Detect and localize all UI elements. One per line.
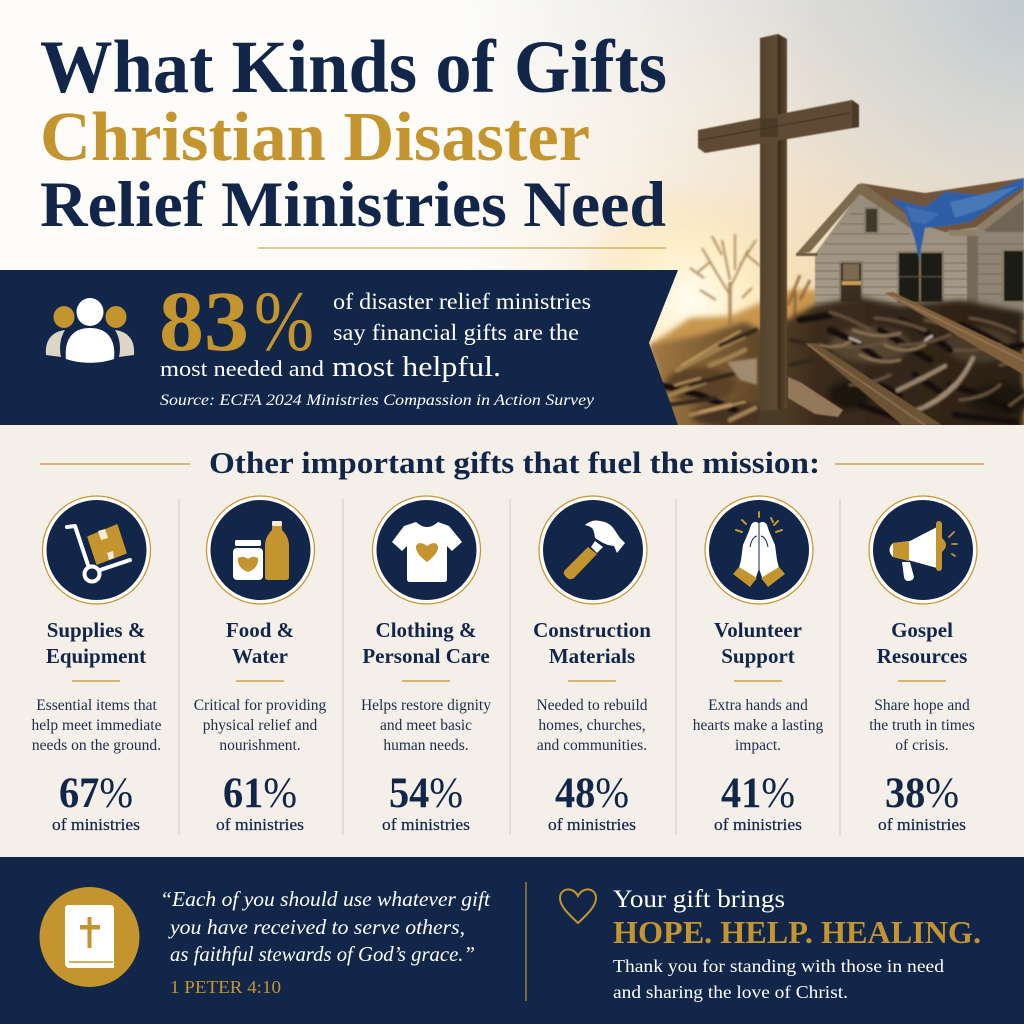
icon: heart outline — [560, 889, 596, 923]
hero photo: cross and damaged house at sunrise — [0, 0, 1024, 430]
icon: hand truck with box — [42, 496, 150, 604]
description: nourishment. — [219, 737, 301, 754]
scripture reference: 1 PETER 4:10 — [170, 977, 281, 997]
statistic: 54% — [389, 770, 463, 817]
description: Helps restore dignity — [361, 697, 491, 714]
panel: gospel resources — [869, 496, 977, 834]
statistic text: most helpful. — [332, 351, 501, 383]
description: physical relief and — [203, 717, 317, 734]
statistic: 38% — [885, 770, 959, 817]
column title: Food & — [226, 618, 294, 642]
statistic: 48% — [555, 770, 629, 817]
statistic: 67% — [59, 770, 133, 817]
statistic text — [160, 289, 591, 383]
scripture quote: you have received to serve others, — [168, 915, 465, 939]
column title: Support — [721, 644, 795, 668]
caption: of ministries — [382, 815, 470, 834]
damaged house — [796, 178, 1024, 320]
description: needs on the ground. — [32, 737, 161, 754]
description: impact. — [735, 737, 781, 754]
description: Critical for providing — [194, 697, 327, 714]
description: hearts make a lasting — [693, 717, 823, 734]
caption: of ministries — [52, 815, 140, 834]
column title: Construction — [533, 618, 651, 642]
panel: clothing and personal care — [361, 496, 491, 834]
big number: % — [254, 273, 314, 369]
debris pile — [650, 297, 1024, 430]
caption: of ministries — [878, 815, 966, 834]
fallen planks — [788, 292, 1024, 425]
description: homes, churches, — [538, 717, 646, 734]
title: What Kinds of Gifts — [40, 26, 667, 109]
title — [40, 26, 667, 241]
description: help meet immediate — [32, 717, 162, 734]
statistic text: most needed and — [160, 356, 324, 381]
panel: volunteer support — [693, 496, 823, 834]
panel: food and water — [194, 496, 327, 834]
column title: Water — [232, 644, 288, 668]
title: Relief Ministries Need — [40, 169, 666, 241]
closing message — [613, 886, 981, 1002]
source: Source: ECFA 2024 Ministries Compassion in Action Survey — [160, 392, 595, 409]
caption: of ministries — [216, 815, 304, 834]
panel: construction materials — [533, 496, 651, 834]
description: and communities. — [537, 737, 647, 754]
distant haze — [650, 290, 830, 360]
big number: 83 — [159, 273, 249, 369]
section heading: Other important gifts that fuel the mission: — [209, 445, 820, 480]
description: and meet basic — [380, 717, 472, 734]
closing message: Thank you for standing with those in need — [613, 956, 944, 976]
footer band — [0, 857, 1024, 1024]
closing message: HOPE. HELP. HEALING. — [613, 914, 981, 950]
column title: Volunteer — [714, 618, 802, 642]
column title: Resources — [877, 644, 967, 668]
statistic text: of disaster relief ministries — [333, 289, 591, 314]
bare tree silhouette — [690, 234, 810, 325]
icon: praying hands — [705, 496, 813, 604]
description: Needed to rebuild — [536, 697, 648, 714]
scripture quote: as faithful stewards of God’s grace.” — [170, 942, 475, 966]
wooden cross — [698, 34, 859, 425]
caption: of ministries — [548, 815, 636, 834]
description: Share hope and — [874, 697, 970, 714]
scripture quote — [160, 887, 491, 966]
icon: hammer — [539, 496, 647, 604]
big number — [159, 273, 314, 369]
statistic: 61% — [223, 770, 297, 817]
panel: supplies and equipment — [32, 496, 162, 834]
column title: Personal Care — [362, 644, 490, 668]
icon: megaphone — [869, 496, 977, 604]
column title: Clothing & — [376, 618, 476, 642]
column title: Gospel — [891, 618, 953, 642]
banner: 83% statistic — [0, 270, 678, 425]
description: of crisis. — [895, 737, 949, 754]
closing message: and sharing the love of Christ. — [613, 982, 848, 1002]
icon: group of people — [46, 298, 134, 363]
column title: Supplies & — [47, 618, 145, 642]
description: human needs. — [383, 737, 469, 754]
description: the truth in times — [869, 717, 975, 734]
blue tarp on roof — [890, 178, 1024, 260]
icon: t-shirt with heart — [372, 496, 480, 604]
icon: jar and bottle — [206, 496, 314, 604]
statistic text: say financial gifts are the — [333, 320, 579, 345]
description: Essential items that — [36, 697, 157, 714]
icon: bible with cross — [40, 887, 140, 987]
description: Extra hands and — [708, 697, 808, 714]
column title: Equipment — [46, 644, 146, 668]
column title: Materials — [549, 644, 635, 668]
statistic: 41% — [721, 770, 795, 817]
title: Christian Disaster — [40, 99, 590, 176]
caption: of ministries — [714, 815, 802, 834]
scripture quote: “Each of you should use whatever gift — [160, 887, 491, 911]
closing message: Your gift brings — [613, 886, 785, 913]
